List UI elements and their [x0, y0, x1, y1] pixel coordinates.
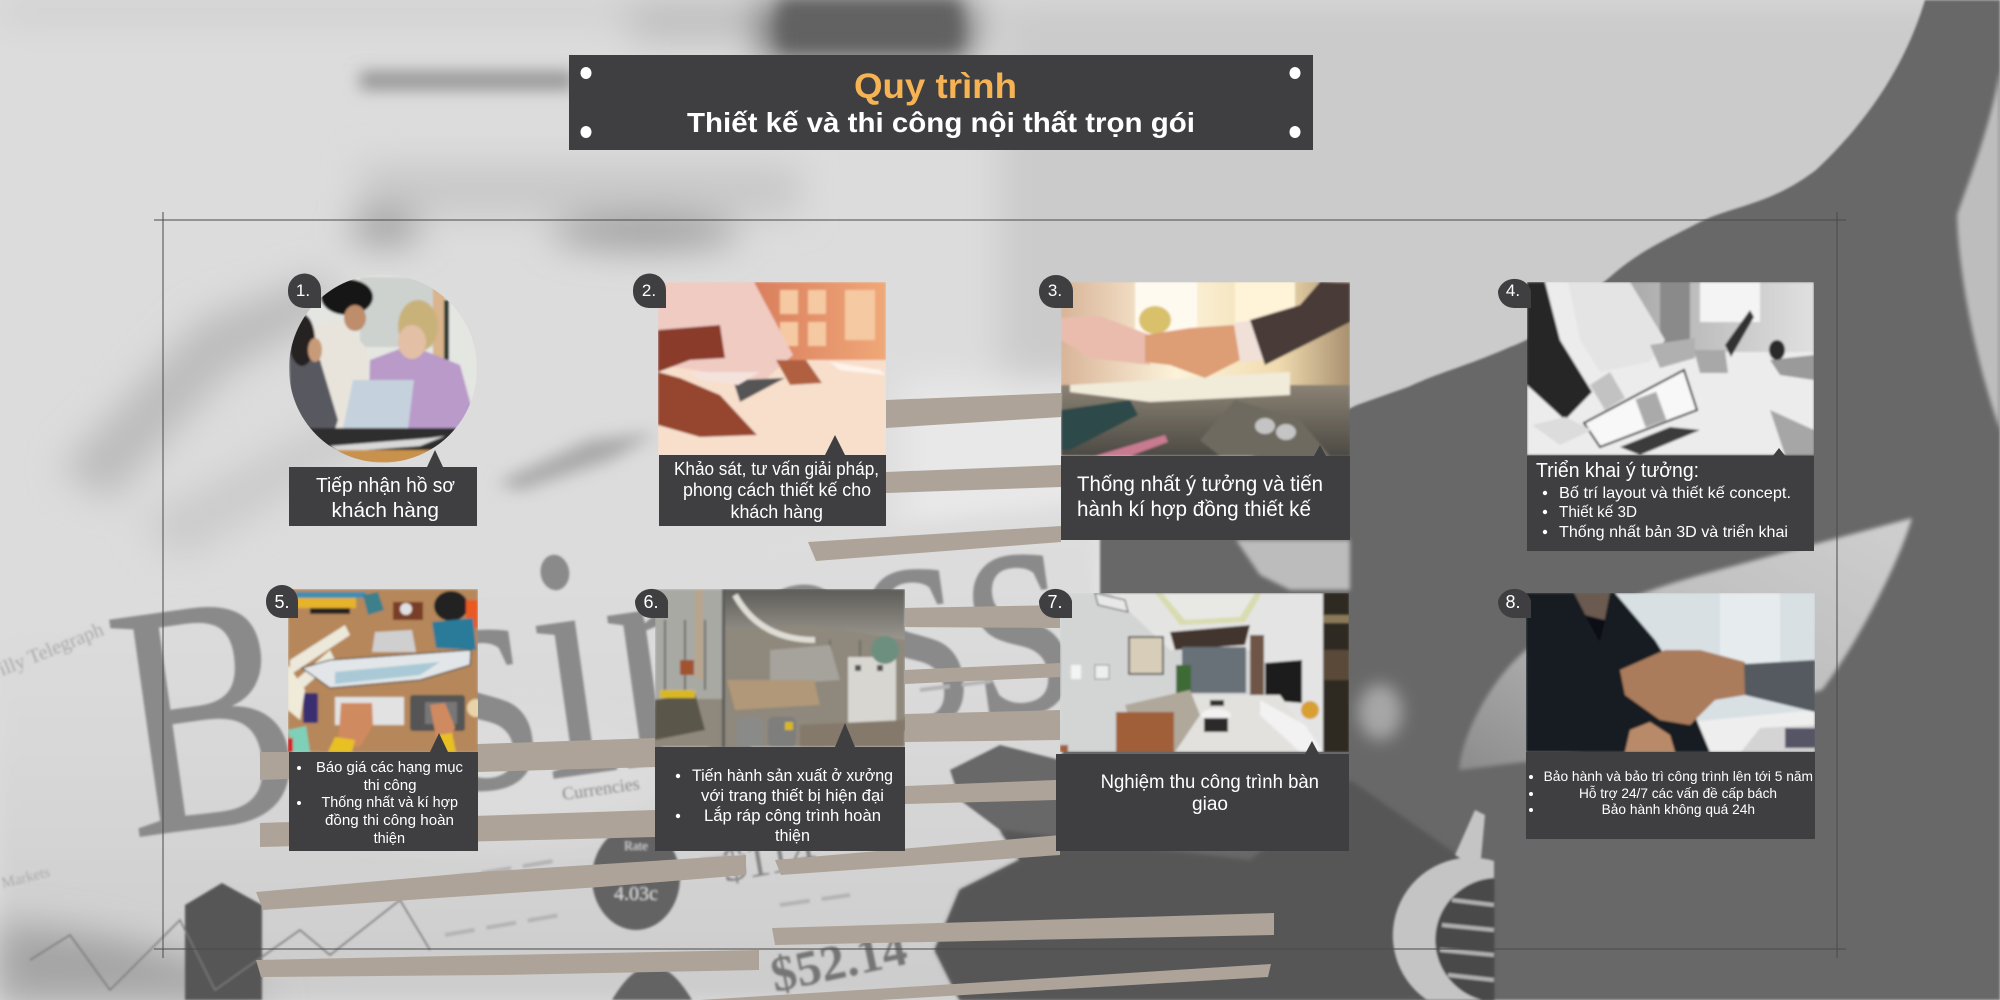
number badge: 4.	[1506, 281, 1520, 300]
number badge: 8.	[1505, 592, 1521, 612]
caption text: Nghiệm thu công trình bàn	[1101, 772, 1319, 793]
background: newspaper page: Rate	[624, 838, 648, 853]
photo: handshake over table	[1061, 282, 1350, 456]
caption pointer	[1314, 445, 1326, 456]
caption text: phong cách thiết kế cho	[683, 480, 871, 500]
photo: team meeting around laptop	[289, 275, 477, 463]
background: dark suit	[935, 0, 2000, 1000]
panel: step 1	[288, 274, 477, 526]
caption box	[289, 467, 477, 526]
caption list	[1543, 485, 1791, 541]
background: light curve by step 8	[1459, 518, 1912, 770]
caption text: khách hàng	[332, 499, 439, 522]
caption text: giao	[1192, 794, 1228, 815]
caption pointer	[430, 733, 448, 752]
caption text: khách hàng	[730, 502, 823, 522]
panel: step 5	[266, 585, 485, 851]
number badge: 2.	[642, 281, 656, 300]
decorative tan brush strokes	[256, 393, 1274, 1000]
panel: step 7	[1039, 589, 1349, 851]
number badge: 1.	[296, 281, 310, 300]
caption pointer	[1772, 448, 1786, 457]
caption box	[659, 455, 886, 526]
background: sleeve	[935, 780, 1494, 1000]
number badge	[1039, 589, 1072, 618]
caption pointer	[825, 435, 845, 455]
number badge	[266, 585, 298, 618]
caption list: thi công	[364, 777, 417, 794]
caption text	[674, 459, 879, 522]
number badge	[1498, 589, 1531, 618]
panel: step 3	[1039, 275, 1350, 540]
background: newspaper page: Markets	[0, 864, 52, 892]
caption list: Thống nhất và kí hợp	[322, 794, 458, 811]
caption pointer	[1305, 741, 1319, 754]
number badge	[288, 274, 321, 308]
caption box	[655, 747, 905, 851]
caption heading: Triển khai ý tưởng:	[1536, 460, 1699, 482]
title line 1: Quy trình	[854, 67, 1017, 106]
background: newspaper page: $114	[718, 824, 820, 893]
background: lighter lobe between steps 7 and 8	[1358, 684, 1402, 740]
caption text: Khảo sát, tư vấn giải pháp,	[674, 459, 879, 479]
caption pointer	[835, 723, 855, 747]
caption list	[676, 766, 893, 845]
number badge: 7.	[1047, 592, 1063, 612]
background: newspaper page: 4.03c	[614, 883, 658, 905]
caption list: Báo giá các hạng mục	[316, 759, 463, 776]
number badge	[1498, 279, 1531, 308]
panel: step 4	[1498, 279, 1814, 551]
caption list: Tiến hành sản xuất ở xưởng	[692, 766, 893, 785]
caption text	[1077, 473, 1323, 521]
frame lines	[154, 212, 1846, 958]
number badge: 3.	[1048, 281, 1062, 300]
caption list: Thiết kế 3D	[1559, 504, 1637, 521]
number badge	[633, 274, 666, 308]
panel: step 2	[633, 274, 886, 526]
photo: handshake sealing the warranty	[1526, 593, 1815, 752]
number badge	[1039, 275, 1073, 308]
caption text: hành kí hợp đồng thiết kế	[1077, 498, 1311, 521]
caption list	[297, 759, 463, 847]
background: light wedge below step 3	[1236, 540, 1350, 590]
panel: step 8	[1498, 589, 1815, 839]
caption list: thiện	[374, 830, 405, 847]
caption list: Thống nhất bản 3D và triển khai	[1559, 523, 1788, 541]
caption list: Bảo hành và bảo trì công trình lên tới 5 năm	[1544, 768, 1813, 784]
background: newspaper page: Business	[91, 409, 1093, 910]
number badge	[635, 589, 668, 618]
caption list: Lắp ráp công trình hoàn	[704, 806, 881, 825]
caption box	[289, 752, 478, 851]
caption list: thiện	[775, 826, 810, 845]
caption text	[316, 474, 455, 522]
caption box	[1526, 752, 1815, 839]
title banner	[569, 55, 1313, 150]
photo: finished living room	[1060, 593, 1349, 752]
panel: step 6	[635, 589, 905, 851]
caption list: đồng thi công hoàn	[325, 812, 454, 829]
photo: designer desk illustration	[288, 589, 485, 752]
background: newspaper page: Currencies	[561, 773, 641, 804]
caption text: Tiếp nhận hồ sơ	[316, 474, 455, 497]
background: watch	[1393, 810, 1494, 1000]
photo: hands over documents in warm light	[658, 282, 886, 455]
number badge: 6.	[643, 592, 659, 612]
caption box	[1056, 754, 1349, 851]
caption text: Thống nhất ý tưởng và tiến	[1077, 473, 1323, 496]
title line 2: Thiết kế và thi công nội thất trọn gói	[687, 107, 1195, 138]
caption list: Bố trí layout và thiết kế concept.	[1559, 485, 1791, 502]
background: right light stripe	[1957, 70, 2000, 430]
caption list: với trang thiết bị hiện đại	[701, 786, 884, 805]
background: newspaper page	[0, 510, 1098, 1000]
caption list	[1529, 768, 1813, 817]
caption text	[1101, 772, 1319, 815]
photo: black and white team reviewing clipboard	[1527, 282, 1814, 455]
caption box	[1527, 456, 1814, 551]
caption pointer	[427, 450, 443, 467]
caption list: Hỗ trợ 24/7 các vấn đề cấp bách	[1579, 785, 1777, 801]
photo: furniture workshop machines	[655, 589, 905, 747]
number badge: 5.	[274, 592, 290, 612]
caption list: Bảo hành không quá 24h	[1602, 801, 1755, 817]
caption box	[1061, 456, 1350, 540]
